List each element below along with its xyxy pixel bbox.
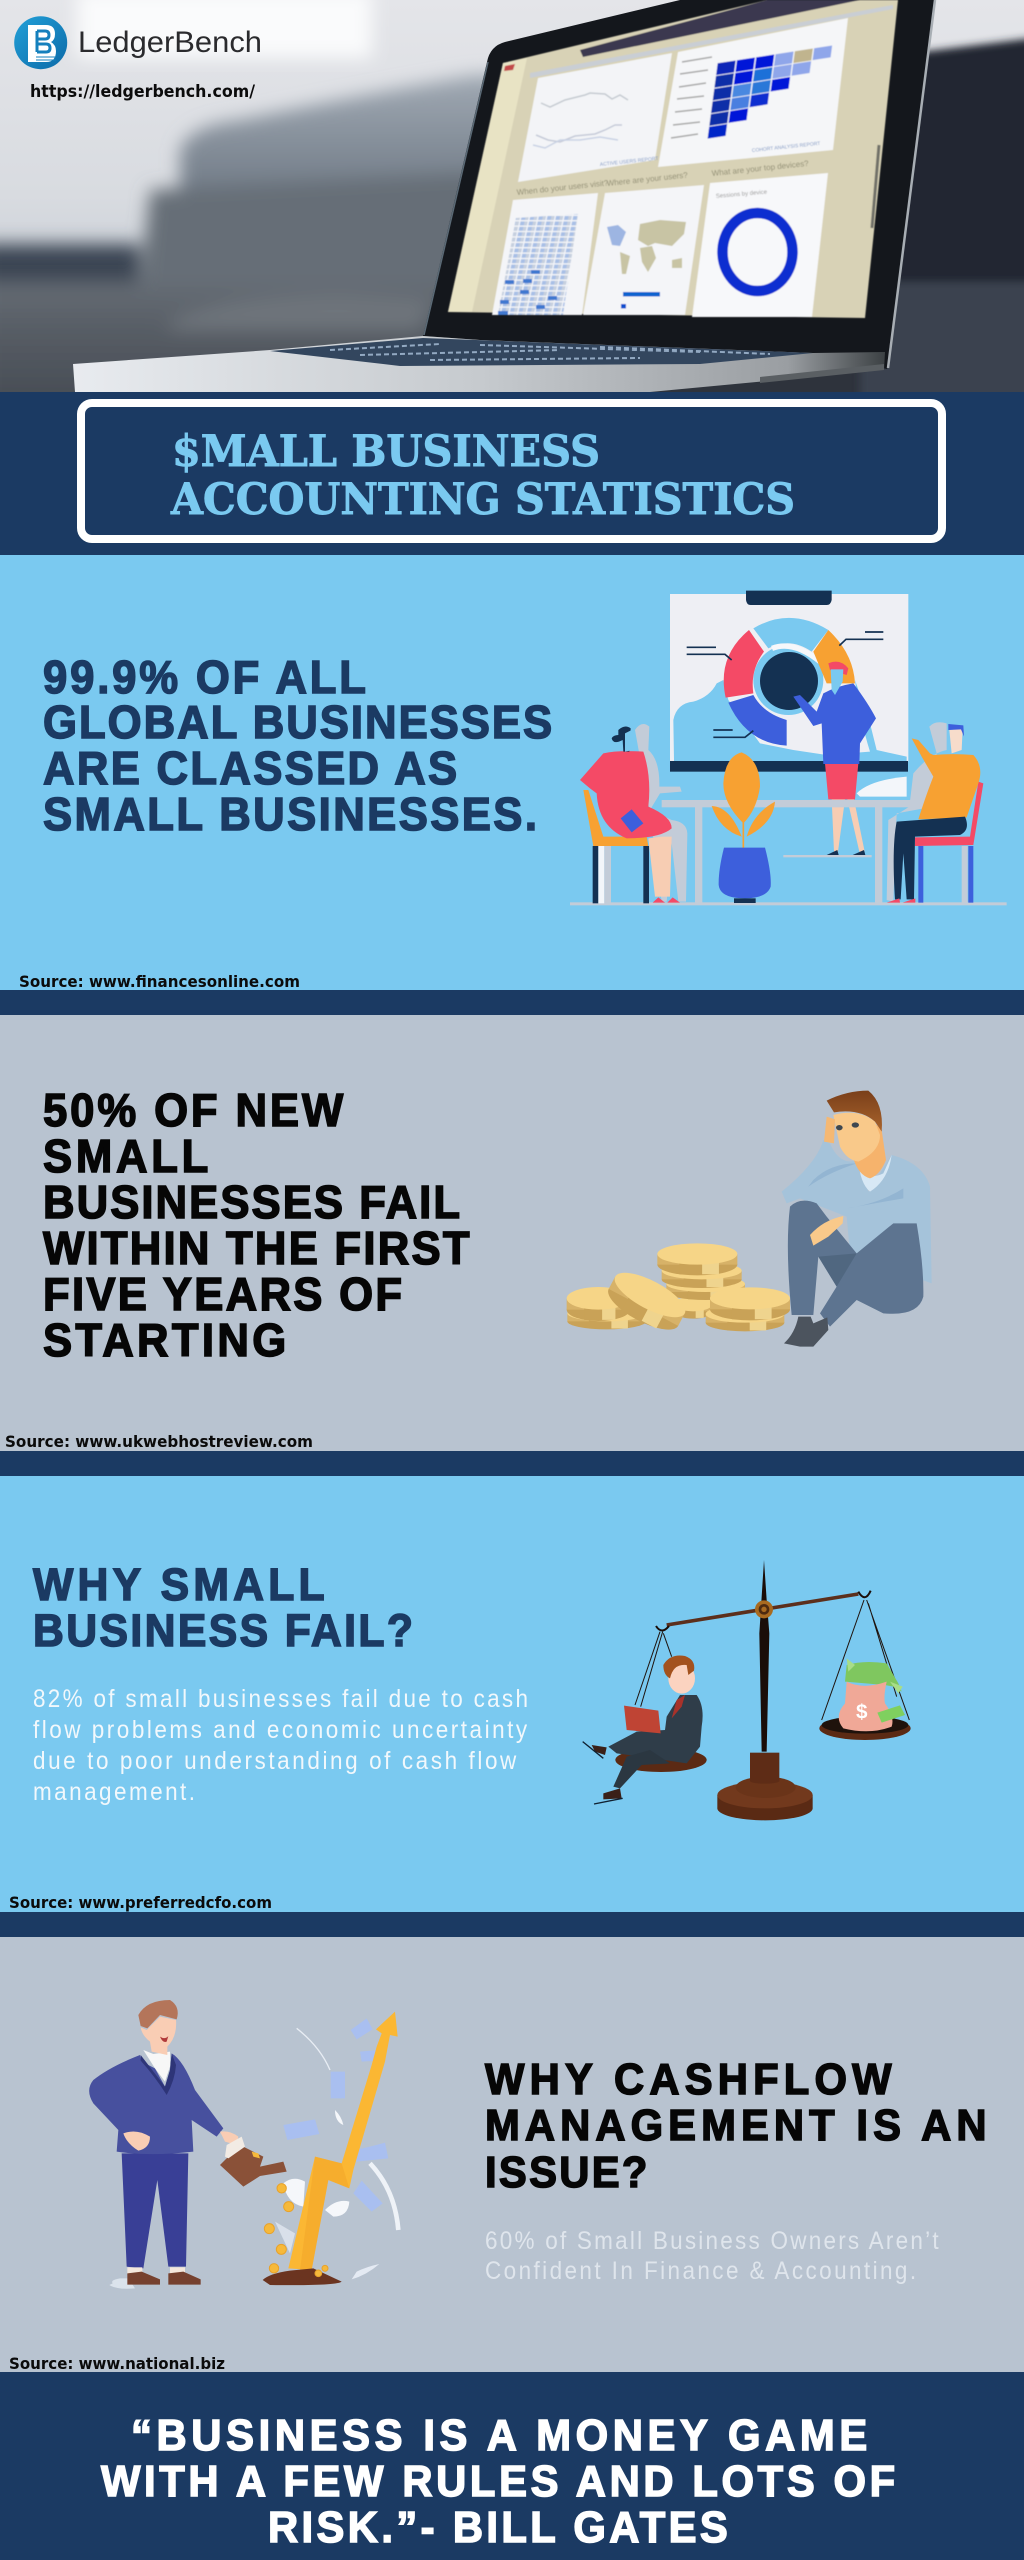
heading xyxy=(43,1084,470,1366)
title text xyxy=(170,427,795,525)
blurred sofa xyxy=(0,75,520,412)
seated man xyxy=(782,1140,932,1283)
panel: line charts xyxy=(518,53,672,182)
laptop keyboard base xyxy=(73,336,885,392)
panel: global businesses xyxy=(0,555,1024,991)
illustration: meeting with pie chart xyxy=(570,591,1007,905)
panel: hour heatmap xyxy=(492,193,598,315)
panel: world map xyxy=(583,185,704,315)
logo: LedgerBench xyxy=(14,16,262,69)
seated man with grey figure xyxy=(887,722,947,902)
body text: Confident In Finance & Accounting. xyxy=(485,2257,916,2285)
heading: WITHIN THE FIRST xyxy=(43,1222,470,1274)
heading: MANAGEMENT IS AN xyxy=(485,2101,987,2150)
heading: BUSINESSES FAIL xyxy=(43,1176,460,1228)
illustration: man watering growth arrow xyxy=(89,2000,398,2289)
section headings on screen: When do your users visit? xyxy=(516,178,609,197)
quote text xyxy=(101,2411,895,2552)
body text: 60% of Small Business Owners Aren’t xyxy=(485,2227,939,2255)
arrow xyxy=(288,2012,398,2270)
table xyxy=(695,807,702,903)
coins xyxy=(567,1243,790,1338)
heading: SMALL BUSINESSES. xyxy=(43,788,537,840)
source: Source: www.national.biz xyxy=(9,2354,225,2373)
quote text: “BUSINESS IS A MONEY GAME xyxy=(131,2411,867,2460)
coins xyxy=(264,2184,328,2277)
section headings on screen: What are your top devices? xyxy=(711,159,810,178)
hero photo: laptop on sofa xyxy=(0,0,1024,412)
fabric under laptop xyxy=(480,300,1024,392)
title text: ACCOUNTING STATISTICS xyxy=(170,475,795,525)
heading: STARTING xyxy=(43,1314,286,1366)
heading xyxy=(485,2055,987,2197)
section headings on screen xyxy=(516,159,810,197)
right sofa and fabric xyxy=(860,38,1024,402)
heading: BUSINESS FAIL? xyxy=(33,1606,413,1656)
source: Source: www.ukwebhostreview.com xyxy=(5,1432,313,1451)
presenter xyxy=(832,799,865,852)
panel: line charts: ACTIVE USERS REPORT xyxy=(600,156,659,168)
body text xyxy=(33,1685,528,1806)
source: Source: www.preferredcfo.com xyxy=(9,1893,272,1912)
heading xyxy=(43,651,552,840)
left pan with man xyxy=(615,1748,707,1772)
footer quote xyxy=(0,2372,1024,2560)
source: Source: www.financesonline.com xyxy=(19,972,300,991)
illustration: worried man and coins xyxy=(567,1091,932,1347)
illustration: balance scale: $ xyxy=(856,1700,868,1723)
title text: $MALL BUSINESS xyxy=(172,427,600,477)
plant xyxy=(712,752,775,837)
heading: ARE CLASSED AS xyxy=(43,742,457,794)
growth background arcs and clouds xyxy=(275,2028,398,2279)
right pan with money bag xyxy=(819,1717,911,1740)
seated woman with grey figure xyxy=(635,724,687,902)
panel: cohort heat table: COHORT ANALYSIS REPORT xyxy=(752,141,821,154)
heading: FIVE YEARS OF xyxy=(43,1268,402,1320)
panel: new business failure xyxy=(0,1015,1024,1451)
panel: device donut xyxy=(692,173,828,317)
window glow xyxy=(77,0,372,58)
body text: 82% of small businesses fail due to cash xyxy=(33,1685,528,1713)
quote text: RISK.”- BILL GATES xyxy=(268,2503,728,2552)
laptop screen xyxy=(448,0,898,318)
panel: cohort heat table xyxy=(658,18,848,167)
panel: device donut: Sessions by device xyxy=(716,189,768,200)
website url: https://ledgerbench.com/ xyxy=(30,82,256,102)
heading: GLOBAL BUSINESSES xyxy=(43,696,552,748)
laptop lid bezel xyxy=(423,0,935,369)
illustration: balance scale xyxy=(583,1560,911,1820)
heading: 50% OF NEW xyxy=(43,1084,344,1136)
heading: SMALL xyxy=(43,1130,208,1182)
panel: cashflow management xyxy=(0,1937,1024,2373)
body text: flow problems and economic uncertainty xyxy=(33,1716,527,1744)
watering can xyxy=(220,2145,287,2187)
body text xyxy=(485,2227,939,2285)
man xyxy=(109,2278,135,2289)
body text: due to poor understanding of cash flow xyxy=(33,1747,517,1775)
heading: ISSUE? xyxy=(485,2148,647,2197)
heading xyxy=(33,1560,413,1656)
panel: why small business fail xyxy=(0,1476,1024,1912)
heading: WHY CASHFLOW xyxy=(485,2055,892,2104)
logo: LedgerBench: LedgerBench xyxy=(78,26,262,59)
heading: 99.9% OF ALL xyxy=(43,651,366,703)
scale base xyxy=(717,1796,813,1820)
money notes xyxy=(283,2018,388,2212)
quote text: WITH A FEW RULES AND LOTS OF xyxy=(101,2457,895,2506)
section headings on screen: Where are your users? xyxy=(606,170,689,188)
title banner xyxy=(0,392,1024,555)
heading: WHY SMALL xyxy=(33,1560,325,1610)
body text: management. xyxy=(33,1778,195,1806)
